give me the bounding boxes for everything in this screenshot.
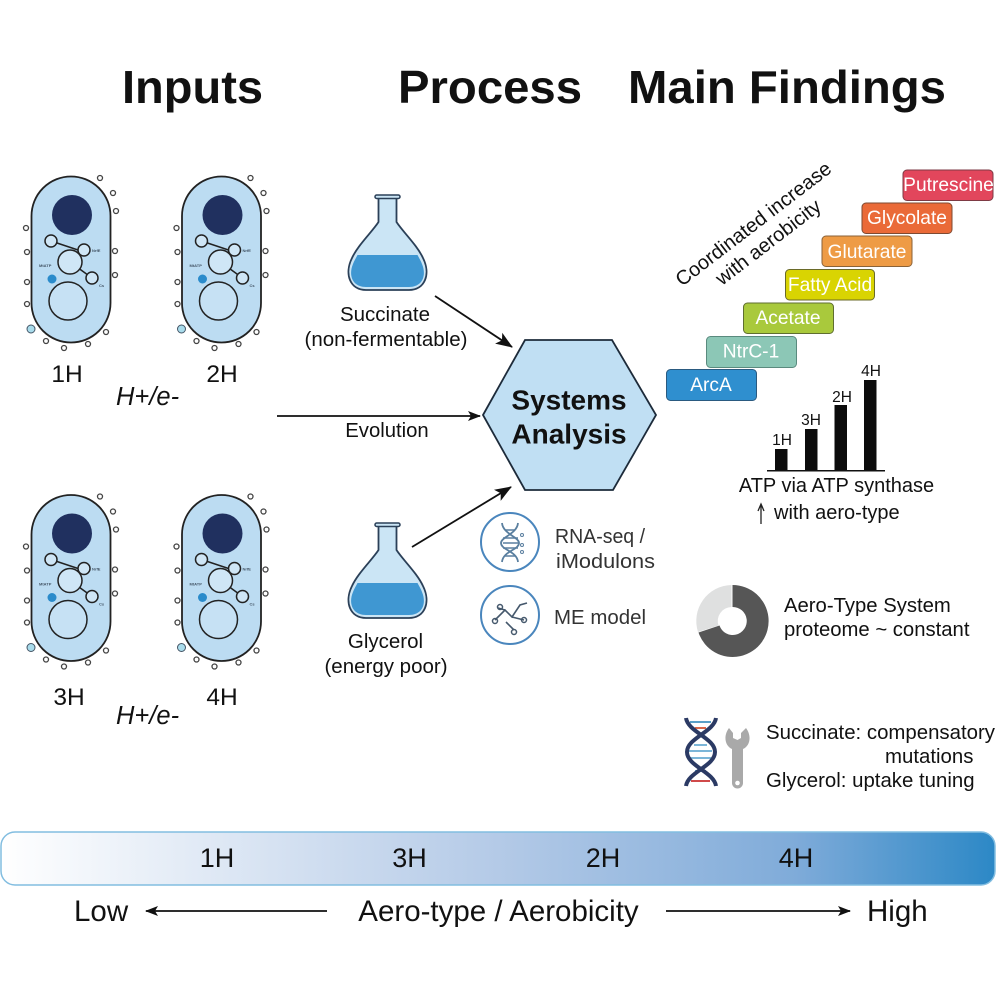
tag: Glutarate xyxy=(822,236,912,266)
label: glycerol uptake tuning: Glycerol: uptake tuning xyxy=(766,770,975,792)
tag: Glycolate xyxy=(862,203,952,234)
label: proteome constant: proteome ~ constant xyxy=(784,619,970,641)
tag: Putrescine xyxy=(903,170,994,200)
hexagon: systems analysis: Systems xyxy=(511,384,627,416)
label: rna-seq: RNA-seq / xyxy=(555,526,645,548)
arrow: succinate to analysis xyxy=(435,296,512,347)
cell: 4H: NrfE xyxy=(242,566,251,572)
arrow: glycerol to analysis xyxy=(412,487,511,547)
label: non-fermentable: (non-fermentable) xyxy=(305,328,467,351)
tag: Putrescine: Putrescine xyxy=(903,175,994,196)
label: me model: ME model xyxy=(554,607,646,629)
scale bar: aero-type: 1H xyxy=(200,843,234,873)
cell labels: 1H xyxy=(51,361,83,388)
icon: up arrow xyxy=(758,504,764,524)
icon: me model xyxy=(481,586,539,644)
bar chart: ATP via ATP synthase: 3H xyxy=(801,412,821,429)
cell: 2H: Cs xyxy=(250,283,255,288)
annotation: with aerobicity: with aerobicity xyxy=(711,195,826,291)
cell labels: 4H xyxy=(206,684,238,711)
label: ATP via ATP synthase: ATP via ATP synthase xyxy=(739,475,934,497)
icon: dna xyxy=(686,718,716,786)
bar chart: ATP via ATP synthase xyxy=(767,363,885,472)
flask: glycerol xyxy=(348,523,427,618)
bar chart: ATP via ATP synthase: 1H xyxy=(772,432,792,449)
cell labels: 2H xyxy=(206,361,238,388)
cell: 3H: NrfE xyxy=(92,566,101,572)
cell: 2H: MtATP xyxy=(190,263,202,268)
tag: ArcA: ArcA xyxy=(690,375,732,396)
flask: succinate xyxy=(348,195,427,290)
cell labels: 3H xyxy=(53,684,85,711)
cell: 2H: NrfE xyxy=(242,248,251,253)
cell: 4H: Cs xyxy=(250,602,255,606)
title: Inputs: Inputs xyxy=(122,61,263,113)
tag: Acetate: Acetate xyxy=(755,308,821,329)
cell labels xyxy=(51,361,238,711)
scale bar: aero-type xyxy=(1,832,995,885)
cell: 1H: NrfE xyxy=(92,248,101,253)
bar chart: ATP via ATP synthase: 2H xyxy=(832,389,852,406)
cell: 1H: MtATP xyxy=(39,263,52,268)
cell: 3H: Cs xyxy=(99,602,105,606)
label: succinate compensatory: Succinate: compensatory xyxy=(766,722,996,744)
scale bar: aero-type: 2H xyxy=(586,843,620,873)
label: imodulons: iModulons xyxy=(556,551,655,573)
label: with aero-type: with aero-type xyxy=(773,502,900,524)
tag: NtrC-1 xyxy=(706,336,796,368)
label: H+/e- top: H+/e- xyxy=(116,383,179,411)
hexagon: systems analysis xyxy=(483,340,656,490)
icon: rna-seq xyxy=(481,513,539,571)
label: glycerol: Glycerol xyxy=(348,630,423,653)
label: aero-type system: Aero-Type System xyxy=(784,595,951,617)
label: H+/e- bottom: H+/e- xyxy=(116,702,179,730)
tag: ArcA xyxy=(666,370,756,400)
label: succinate: Succinate xyxy=(340,303,430,326)
label: low: Low xyxy=(74,895,129,928)
icon: wrench xyxy=(725,728,750,789)
label: high: High xyxy=(867,895,928,928)
annotation: coordinated increase: Coordinated increase xyxy=(672,158,836,291)
tag: Acetate xyxy=(744,303,834,334)
cell: 3H xyxy=(24,494,118,669)
tag: NtrC-1: NtrC-1 xyxy=(723,342,779,362)
label: mutations: mutations xyxy=(885,746,973,768)
label: evolution: Evolution xyxy=(345,420,429,442)
tag: Fatty Acid xyxy=(786,270,874,300)
tag: Glycolate: Glycolate xyxy=(867,208,947,229)
label: aero-type / aerobicity: Aero-type / Aerobicity xyxy=(358,895,639,928)
bar chart: ATP via ATP synthase: 4H xyxy=(861,363,881,380)
cell: 1H: Cs xyxy=(99,283,105,288)
cell: 4H xyxy=(174,494,269,669)
title: Process: Process xyxy=(398,61,582,113)
hexagon: systems analysis: Analysis xyxy=(511,418,627,450)
label: energy poor: (energy poor) xyxy=(324,655,448,678)
arrow: high xyxy=(666,910,850,912)
tag: Glutarate: Glutarate xyxy=(828,242,906,263)
tag: Fatty Acid: Fatty Acid xyxy=(788,275,872,296)
cell: 1H xyxy=(24,176,118,350)
arrow: evolution xyxy=(277,415,480,417)
donut chart: proteome xyxy=(696,585,769,657)
scale bar: aero-type: 3H xyxy=(392,843,427,873)
cell: 3H: MtATP xyxy=(39,582,52,586)
title: Main Findings: Main Findings xyxy=(628,61,946,113)
cell: 2H xyxy=(174,176,269,350)
cell: 4H: MtATP xyxy=(190,582,202,586)
arrow: low xyxy=(146,910,327,912)
scale bar: aero-type: 4H xyxy=(779,843,813,873)
